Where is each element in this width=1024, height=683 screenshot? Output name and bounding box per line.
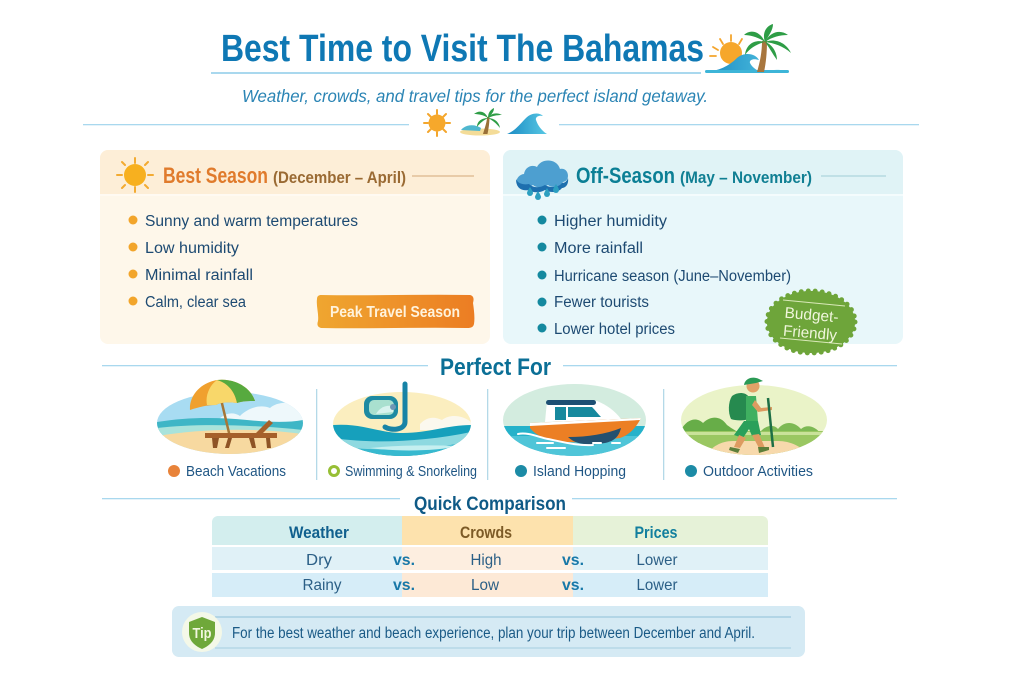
badge: budget-friendly (767, 291, 855, 353)
panel header: best season (100, 150, 490, 194)
list: off-season (538, 213, 791, 338)
panel: best season (100, 150, 490, 344)
illustration: swimming and snorkeling (333, 384, 471, 460)
icon: tip shield: Tip (192, 625, 212, 642)
heading: best season: Best Season (163, 163, 268, 188)
badge: peak travel season: Peak Travel Season (330, 304, 460, 321)
list: best season: Sunny and warm temperatures (145, 213, 358, 230)
comparison table: vs. (393, 552, 415, 569)
comparison table: High (470, 552, 502, 569)
illustration: beach vacations (157, 380, 303, 460)
comparison table: Low (471, 577, 499, 594)
list: off-season: More rainfall (554, 240, 643, 257)
list: off-season: Fewer tourists (554, 294, 649, 311)
tip text: For the best weather and beach experience, plan your trip between December and April. (232, 625, 755, 642)
label: outdoor activities: Outdoor Activities (703, 464, 813, 480)
comparison table: vs. (393, 577, 415, 594)
badge: budget-friendly: Friendly (782, 323, 838, 344)
icon: sun, wave and palm (705, 24, 791, 73)
comparison table: vs. (562, 577, 584, 594)
list: best season: Calm, clear sea (145, 294, 246, 311)
comparison table: Rainy (302, 577, 342, 594)
label: swimming and snorkeling: Swimming & Snorkeling (345, 464, 477, 480)
callout: tip (172, 606, 805, 657)
subtitle: Weather, crowds, and travel tips for the perfect island getaway. (242, 86, 708, 106)
heading: quick comparison: Quick Comparison (414, 494, 566, 515)
label: island hopping: Island Hopping (533, 464, 626, 480)
comparison table: Prices (634, 524, 678, 542)
heading: off-season: Off-Season (576, 163, 675, 188)
comparison table (212, 516, 768, 597)
comparison table: Dry (306, 552, 332, 569)
list: off-season: Higher humidity (554, 213, 667, 230)
list: best season: Minimal rainfall (145, 267, 253, 284)
comparison table: Crowds (460, 524, 512, 542)
icon: sun (117, 158, 153, 192)
list: off-season: Hurricane season (June–November) (554, 268, 791, 285)
icon: rain cloud (516, 160, 568, 200)
panel: off-season (503, 150, 903, 353)
icon: tip shield (182, 612, 222, 652)
list: best season (128, 213, 358, 311)
comparison table: Weather (289, 524, 350, 542)
comparison table: vs. (562, 552, 584, 569)
list: best season: Low humidity (145, 240, 239, 257)
badge: budget-friendly: Budget- (784, 305, 839, 326)
heading dates: (December – April) (273, 168, 406, 187)
heading months: (May – November) (680, 168, 812, 187)
heading: perfect for: Perfect For (440, 354, 551, 381)
icon: divider sun (424, 110, 450, 136)
illustration: island hopping (503, 384, 646, 458)
illustration: outdoor activities (681, 378, 827, 460)
comparison table: Lower (636, 577, 678, 594)
title: Best Time to Visit The Bahamas (221, 28, 704, 70)
list: off-season: Lower hotel prices (554, 321, 675, 338)
icon: divider island (460, 108, 502, 136)
panel header: off-season (503, 150, 903, 194)
icon: divider wave (507, 114, 547, 134)
badge: peak travel season (317, 295, 474, 328)
comparison table: Lower (636, 552, 678, 569)
label: beach vacations: Beach Vacations (186, 464, 286, 480)
